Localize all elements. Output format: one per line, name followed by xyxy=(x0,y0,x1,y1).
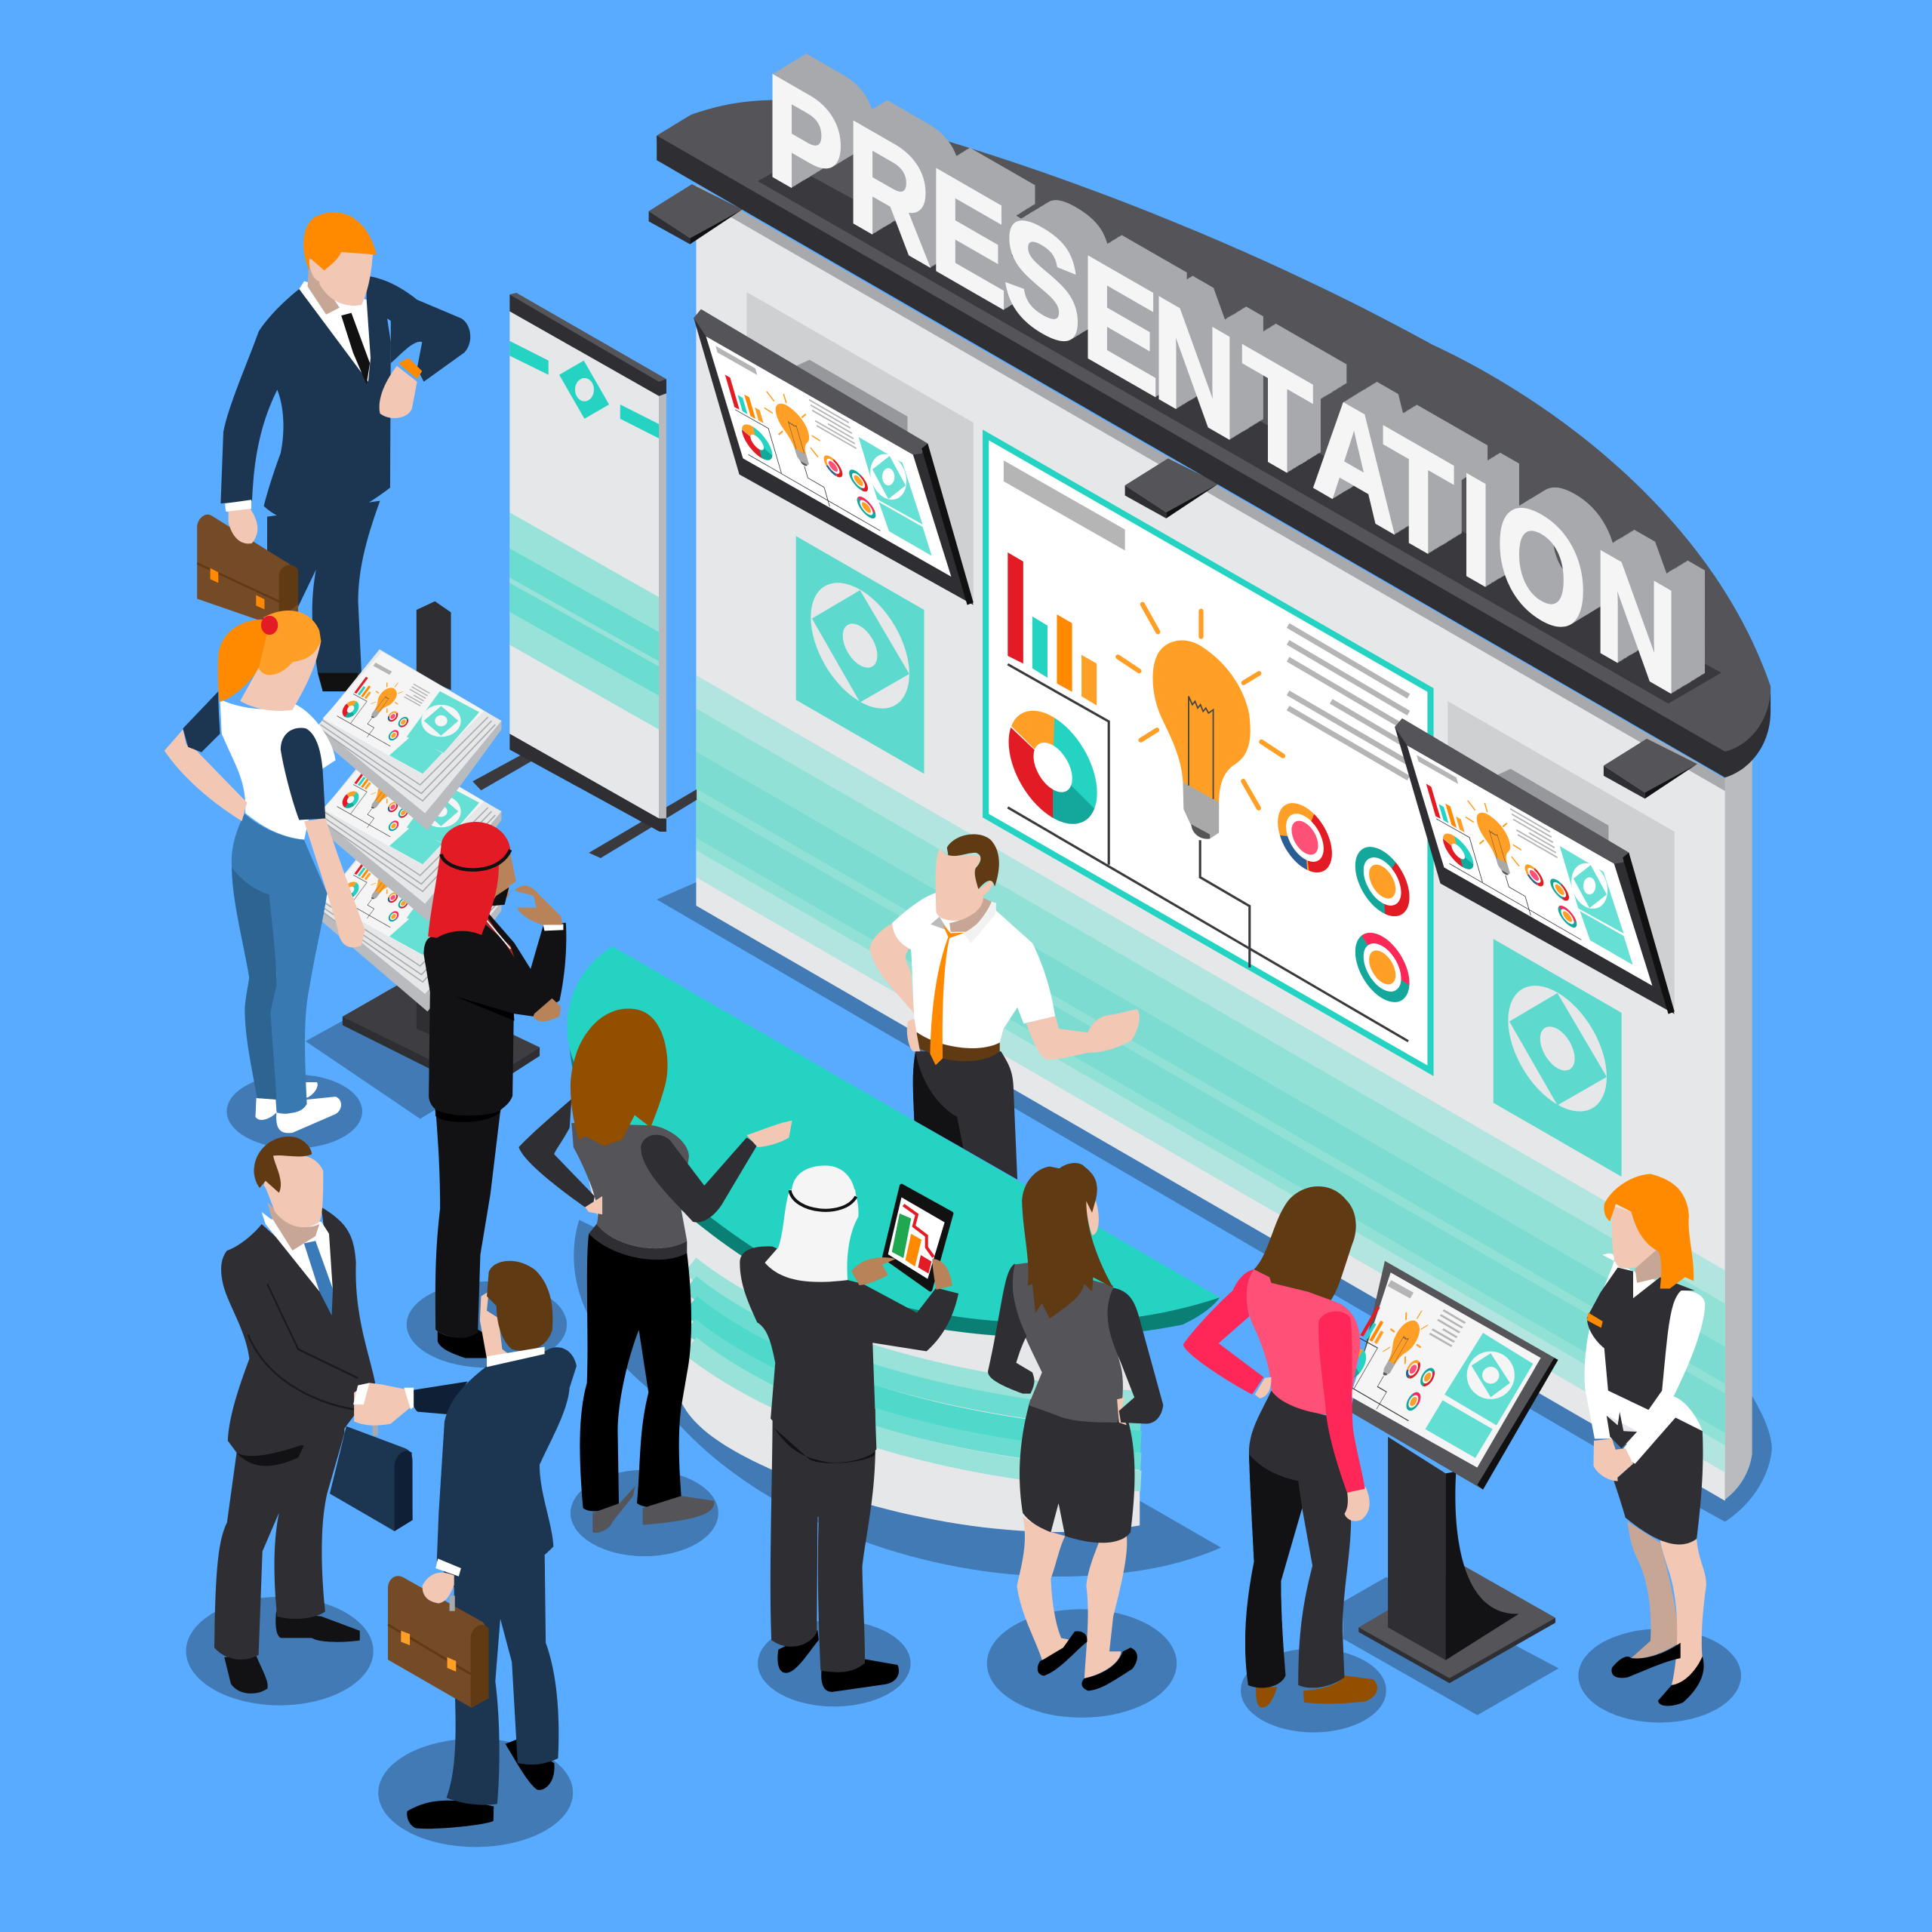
person: presenter in white shirt xyxy=(869,834,1140,1180)
person: receptionist with orange hair xyxy=(1585,1174,1706,1706)
person: man in black suit shaking hands xyxy=(214,1137,413,1694)
person: man in navy suit with briefcase xyxy=(353,1261,577,1829)
wall teal icon panel right xyxy=(1494,939,1622,1177)
roll-up banner xyxy=(472,293,697,858)
title: PRESENTATION 3D lettering: PRESENTATION xyxy=(766,41,1678,728)
roof brackets xyxy=(649,184,1697,798)
person: woman with ponytail and jeans xyxy=(165,611,365,1133)
person: man checking watch with briefcase xyxy=(197,212,470,691)
brochure rack xyxy=(309,601,540,1094)
roof canopy xyxy=(657,100,1770,777)
person: woman in pink top xyxy=(1183,1186,1377,1707)
person: man with red headscarf xyxy=(423,822,566,1358)
right monitor xyxy=(1395,701,1675,1014)
reception counter xyxy=(567,946,1220,1532)
information kiosk xyxy=(1296,1256,1558,1683)
person: man in white headdress with tablet xyxy=(740,1165,958,1692)
person: woman in grey vest and skirt xyxy=(988,1163,1163,1690)
main poster xyxy=(986,435,1431,1071)
person: woman with auburn hair xyxy=(518,1008,792,1533)
top-left monitor xyxy=(694,292,974,605)
floor shadows xyxy=(186,882,1772,1847)
wall teal icon panel left xyxy=(796,536,924,774)
exhibition wall xyxy=(696,185,1752,1501)
